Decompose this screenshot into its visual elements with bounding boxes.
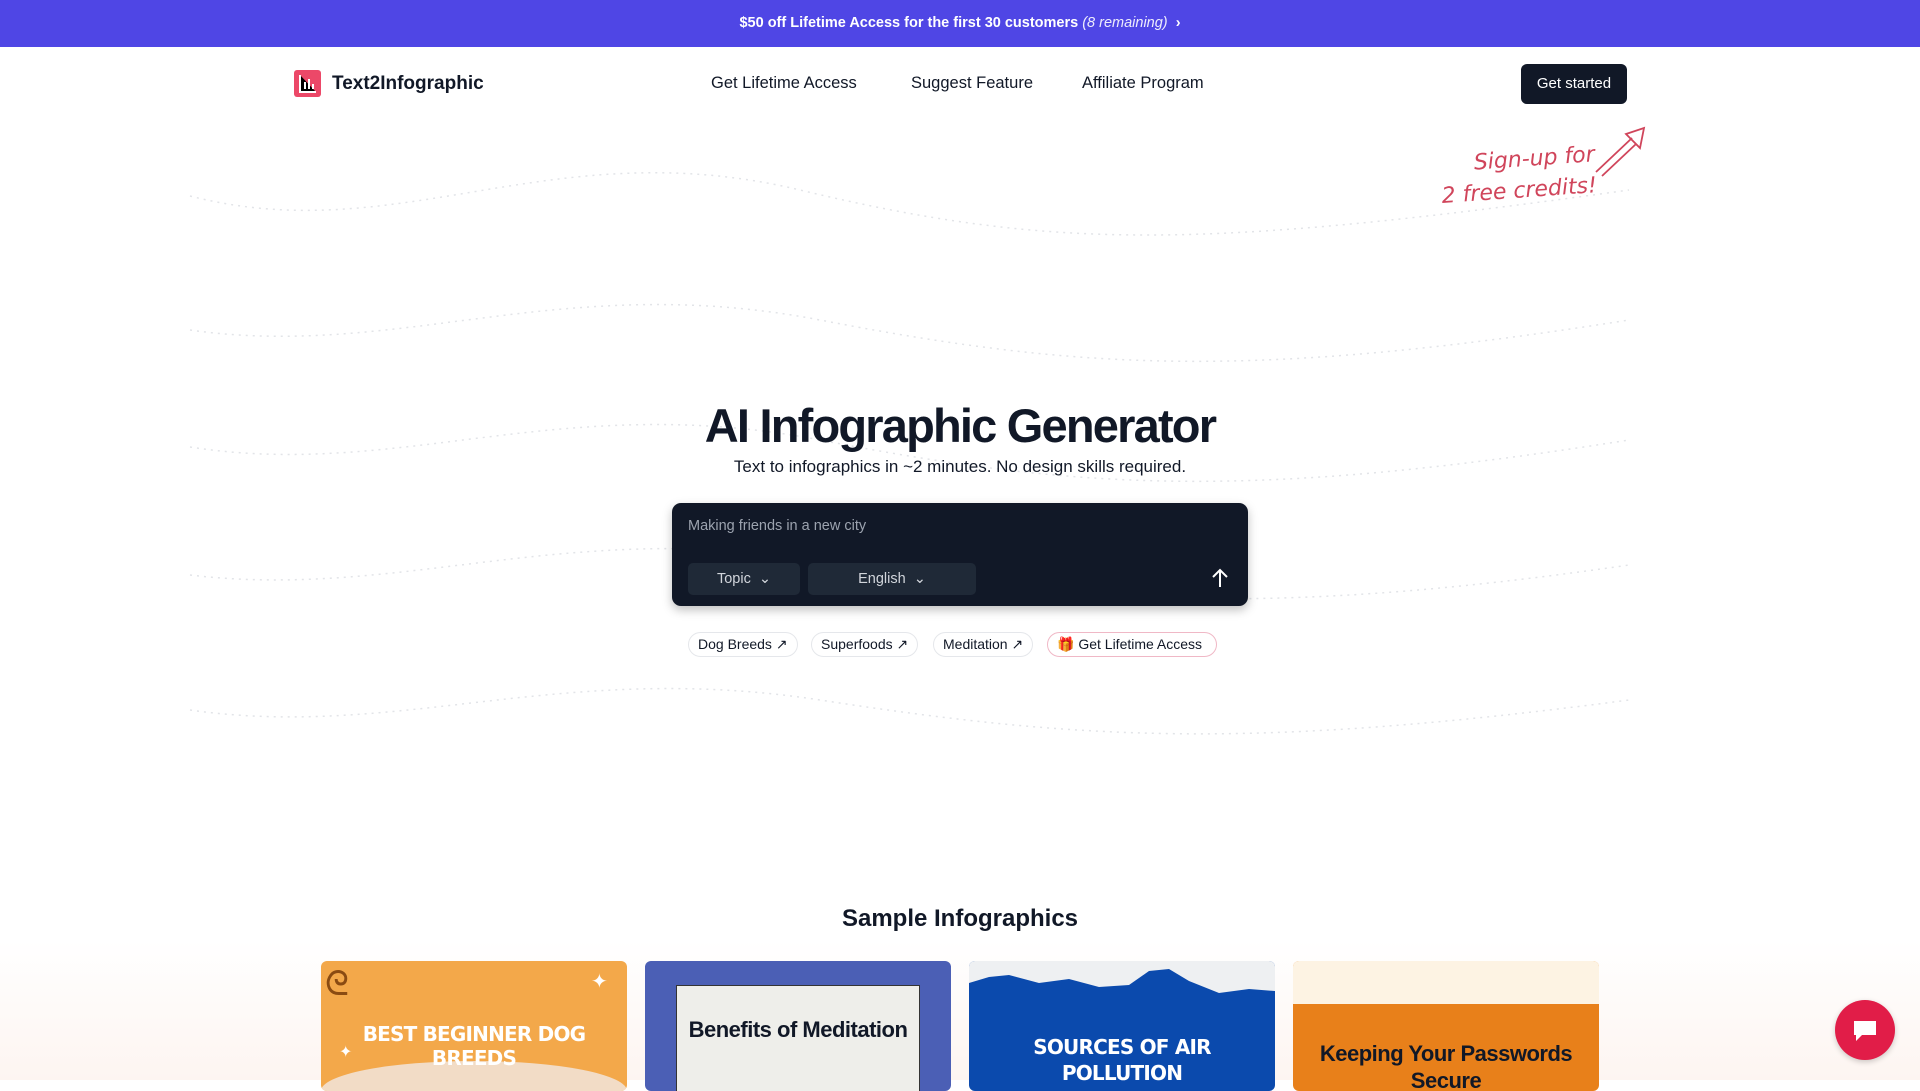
chips [688, 632, 1217, 657]
topic select: Topic ⌄ [717, 571, 771, 587]
card: dog breeds: ᘓ [325, 965, 349, 1003]
icon: logo [294, 70, 321, 97]
get started button: Get started [1537, 75, 1611, 92]
chips: Superfoods ↗ [821, 636, 908, 652]
card: dog breeds: ✦ [339, 1044, 352, 1061]
topic select [688, 563, 800, 595]
card: dog breeds: BEST BEGINNER DOG [363, 1022, 585, 1046]
card: air pollution: SOURCES OF AIR [1033, 1035, 1211, 1059]
promo banner [0, 0, 1920, 47]
nav links: Get Lifetime Access [711, 74, 857, 92]
card: dog breeds: BREEDS [432, 1046, 516, 1070]
card: air pollution: POLLUTION [1062, 1061, 1182, 1085]
callout: sign up: 2 free credits! [1441, 173, 1598, 209]
bottom tint [0, 940, 1920, 1080]
nav links: Affiliate Program [1082, 74, 1204, 92]
card: air pollution [969, 961, 1275, 1091]
chips: Meditation ↗ [943, 636, 1023, 652]
callout: sign up: Sign-up for [1473, 142, 1596, 176]
logo: Text2Infographic [332, 72, 484, 94]
language select: English ⌄ [858, 571, 926, 587]
nav links [711, 74, 1204, 92]
card: meditation: Benefits of Meditation [689, 1017, 907, 1042]
title: AI Infographic Generator [705, 399, 1215, 452]
promo banner: $50 off Lifetime Access for the first 30 customers (8 remaining) › [739, 15, 1181, 31]
language select [808, 563, 976, 595]
card: meditation [645, 961, 951, 1091]
callout: sign up [1441, 142, 1598, 209]
subtitle: Text to infographics in ~2 minutes. No design skills required. [734, 457, 1186, 476]
get started button [1521, 64, 1627, 104]
arrow [1596, 126, 1646, 177]
card: passwords [1293, 961, 1599, 1091]
section heading: Sample Infographics [842, 905, 1078, 932]
logo [294, 70, 484, 97]
card: dog breeds [321, 961, 627, 1091]
card: passwords: Keeping Your Passwords [1320, 1041, 1572, 1066]
chat bubble [1835, 1000, 1895, 1060]
icon: submit arrow [1212, 568, 1228, 587]
chips: 🎁 Get Lifetime Access [1057, 636, 1202, 652]
nav links: Suggest Feature [911, 74, 1033, 92]
card: dog breeds: ✦ [591, 971, 608, 993]
placeholder: Making friends in a new city [688, 518, 866, 534]
chips: Dog Breeds ↗ [698, 636, 788, 652]
input box [672, 503, 1248, 606]
